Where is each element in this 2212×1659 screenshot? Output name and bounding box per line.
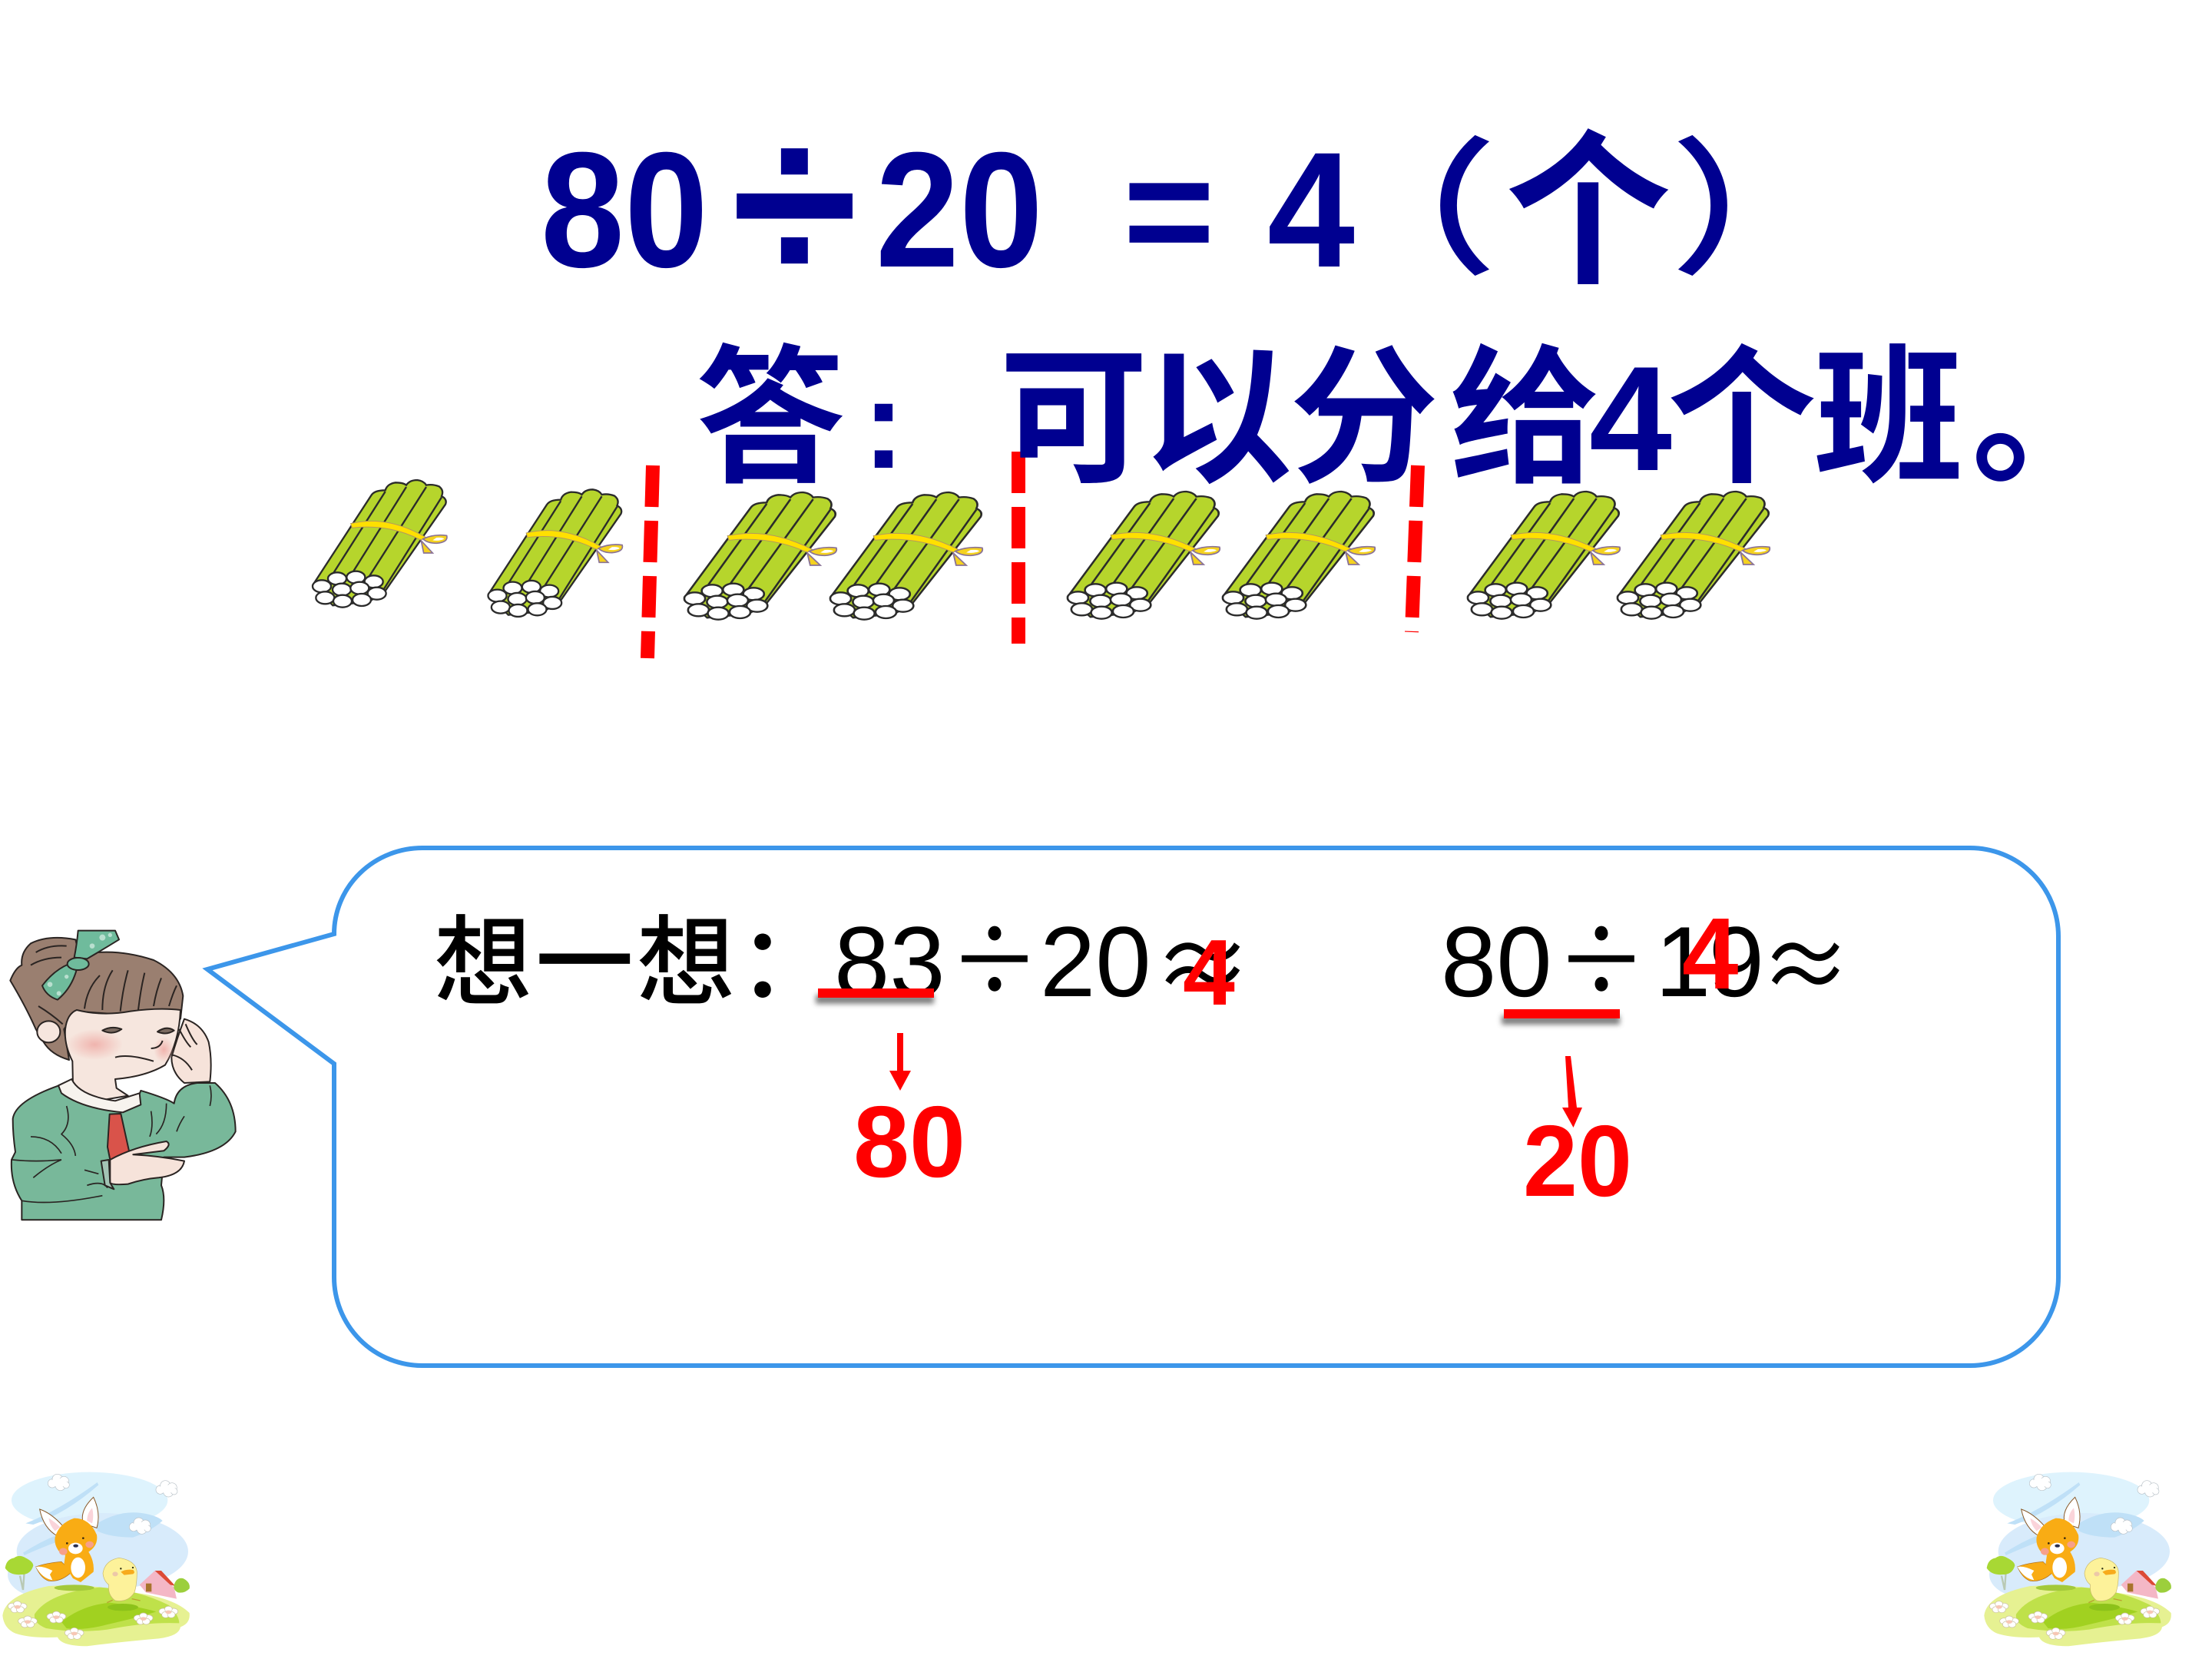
division sign: ÷	[1556, 881, 1647, 1025]
girl ear	[37, 1021, 60, 1042]
right estimate expression	[1441, 881, 1851, 1031]
answer sentence: 个	[1667, 297, 1816, 513]
bundle 7	[1468, 492, 1620, 619]
left estimate expression	[834, 881, 1253, 1031]
girl hair and bun	[10, 938, 183, 1060]
approx sign: ≈	[1760, 886, 1851, 1031]
approx sign: ≈	[1153, 886, 1253, 1031]
decoration: fox and chick scene left	[2, 1472, 190, 1646]
title equation: =	[1123, 123, 1215, 299]
sweater	[12, 1083, 236, 1220]
answer sentence: 可	[999, 297, 1148, 513]
bundle 8	[1618, 492, 1770, 619]
division sign: ÷	[949, 881, 1040, 1025]
bamboo bundles: eight bundles of sticks	[313, 480, 1770, 620]
decoration: fox and chick scene right	[1984, 1472, 2171, 1646]
bundle 3	[684, 492, 836, 620]
hair strands and facial features	[31, 945, 197, 1070]
title equation	[541, 74, 1840, 332]
speech bubble outline with tail	[207, 848, 2058, 1366]
answer sentence: 分	[1290, 297, 1439, 513]
arrow: 83 rounds to 80	[889, 1033, 911, 1091]
answer sentence: 班	[1814, 297, 1963, 513]
title equation: 4	[1267, 118, 1355, 302]
red dashed dividers between groups	[647, 452, 1418, 658]
icon: thinking girl	[10, 931, 236, 1220]
title equation: 80	[541, 118, 708, 302]
left underline with shadow	[816, 988, 934, 1004]
title equation: 20	[876, 118, 1043, 302]
division sign: ÷	[731, 74, 858, 332]
bundle 5	[1068, 492, 1220, 619]
girl raised hand	[171, 1019, 211, 1083]
bundle 2	[488, 489, 622, 617]
bundle 1	[313, 480, 447, 608]
prompt text: think about it: 想一想：	[434, 883, 839, 1025]
right estimate expression: 80	[1441, 906, 1552, 1018]
red rounded number 80: 80	[853, 1085, 965, 1198]
measure word: 个	[1505, 78, 1671, 318]
opening parenthesis: （	[1327, 94, 1493, 301]
answer sentence: 答	[696, 297, 845, 513]
left estimate expression: 20	[1040, 906, 1151, 1018]
girl lower hand	[110, 1141, 184, 1184]
answer sentence: 给	[1450, 297, 1599, 513]
answer sentence: 以	[1143, 297, 1292, 513]
answer sentence: 4	[1589, 336, 1672, 502]
closing parenthesis: ）	[1674, 94, 1840, 301]
red answer 4 left: 4	[1183, 920, 1235, 1025]
left estimate expression: 83	[834, 906, 945, 1018]
bundle 4	[830, 492, 982, 620]
arrow: 19 rounds to 20	[1562, 1056, 1582, 1128]
girl neck and face	[65, 1009, 180, 1101]
answer sentence: 。	[1972, 297, 2121, 513]
answer sentence: :	[863, 353, 905, 495]
red tie	[108, 1114, 129, 1160]
red rounded number 20: 20	[1523, 1104, 1632, 1217]
red answer 4 right: 4	[1682, 897, 1738, 1010]
sleeve cuff	[101, 1160, 114, 1189]
right underline with shadow	[1502, 1009, 1620, 1025]
bundle 6	[1223, 492, 1375, 619]
green hair bow	[42, 931, 119, 1000]
right estimate expression: 19	[1655, 906, 1764, 1018]
white collar	[58, 1079, 141, 1112]
sweater folds	[12, 1085, 211, 1203]
